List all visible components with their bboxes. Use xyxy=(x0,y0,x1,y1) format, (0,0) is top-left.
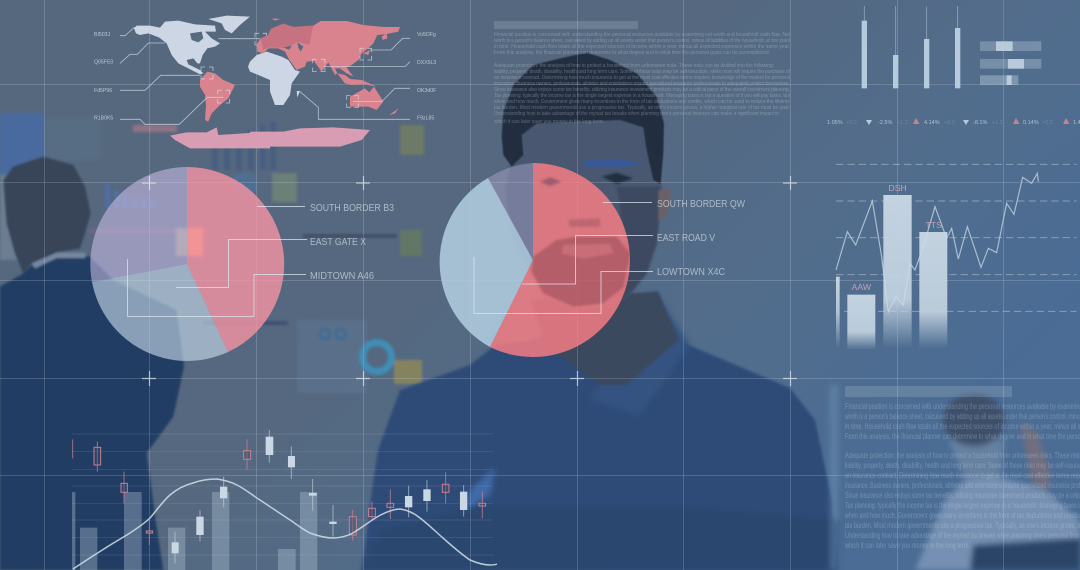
cross markers xyxy=(142,176,797,386)
labels: SOUTH BORDER B3 xyxy=(310,202,394,214)
ticker row: -8.1% xyxy=(973,120,987,126)
labels xyxy=(657,198,745,278)
map: Eurasia xyxy=(257,21,400,77)
text block: top centre: Understanding how to take advantage of the myriad tax breaks when planning one's personal finances can make a significant impact in xyxy=(494,111,779,117)
ticker row: 4.14% xyxy=(924,120,940,126)
map: Africa xyxy=(248,52,300,105)
map: inland seas xyxy=(283,42,303,52)
map: Europe and Russia shade xyxy=(261,24,313,50)
ticker row: -2.5% xyxy=(878,120,892,126)
eyebrow xyxy=(583,159,645,167)
ticker row: +1.2 xyxy=(992,120,1003,126)
smooth trend curve xyxy=(73,479,497,569)
bars xyxy=(836,277,840,348)
slice: pink xyxy=(490,163,630,357)
text block: lower right xyxy=(844,386,1080,550)
map: location codes: F9zL85 xyxy=(417,116,434,122)
text block: top centre: an insurance contract. Determining how much insurance to get at the most cost effective terms requires knowledge of the market for personal xyxy=(494,75,790,81)
map: location codes: Vo5DFg xyxy=(417,32,436,38)
text block: top centre: when and how much. Government gives many incentives in the form of tax deductions and credits, which can be used to reduce the lifetime xyxy=(494,99,790,105)
pink candles xyxy=(73,439,486,545)
text block: top centre: tax burden. Most modern governments use a progressive tax. Typically, as one's income grows, a higher marginal rate of tax must be paid. xyxy=(494,105,790,111)
map: location codes: OK3d0F xyxy=(417,88,436,94)
text block: top centre: which it can later save you money in the long term. xyxy=(494,119,604,125)
slice: lavender xyxy=(90,167,187,282)
labels: EAST ROAD V xyxy=(657,232,715,244)
neck xyxy=(530,292,678,385)
candlestick and area chart: bottom left xyxy=(72,430,493,570)
ticker row xyxy=(827,118,1080,126)
map: Antarctica east xyxy=(250,127,370,147)
map: Old World xyxy=(248,18,410,147)
ticker row: +0.2 xyxy=(1042,120,1053,126)
text block: lower right: which it can later save you money in the long term. xyxy=(844,540,970,550)
text block: top centre: Financial position is concerned with understanding the personal resources available by examining net worth and household cash flow. Net xyxy=(494,32,791,38)
face features seen through the pie xyxy=(532,177,630,307)
bar and line chart: right xyxy=(836,164,1077,350)
head group xyxy=(502,53,678,385)
bar labels: TTS xyxy=(925,220,942,230)
ticker row: +0.2 xyxy=(846,120,857,126)
ticker row: +0.3 xyxy=(944,120,955,126)
map: Hudson Bay xyxy=(190,32,203,42)
face xyxy=(505,113,663,308)
map: east connector lines xyxy=(300,38,410,119)
labels: SOUTH BORDER QW xyxy=(657,198,745,210)
map: location codes: BI503J xyxy=(94,32,111,38)
slice: pink xyxy=(187,167,284,352)
connector lines xyxy=(474,202,653,314)
range bars xyxy=(980,41,1041,85)
right ear xyxy=(658,188,672,220)
map: location codes: DXX5L3 xyxy=(417,60,436,66)
candlestick summary: top right xyxy=(862,6,1041,88)
photo: central man xyxy=(362,53,838,570)
map: Asian islands and Australia xyxy=(272,18,398,115)
pie chart: left xyxy=(90,167,394,361)
map: location codes: R1B0K5 xyxy=(94,116,113,122)
labels: MIDTOWN A46 xyxy=(310,270,374,282)
head xyxy=(3,157,91,273)
labels: LOWTOWN X4C xyxy=(657,266,725,278)
slice: lavender xyxy=(488,163,533,260)
collar xyxy=(32,253,86,268)
map: North America xyxy=(134,21,220,74)
hair xyxy=(502,53,664,184)
map: Madagascar xyxy=(297,91,300,98)
shirt xyxy=(362,292,838,570)
shirt details xyxy=(362,292,838,570)
photo: man in suit at left xyxy=(0,157,184,570)
slice: light blue xyxy=(92,264,228,361)
right cheek shade xyxy=(610,187,662,303)
connector lines xyxy=(128,206,307,316)
world map with callouts xyxy=(94,16,436,148)
background bars xyxy=(72,492,317,570)
white candles xyxy=(172,430,467,563)
map: location codes: Q05FE0 xyxy=(94,60,113,66)
ticker row: 0.14% xyxy=(1023,120,1039,126)
slice: light blue xyxy=(440,178,533,347)
text block: top centre: Adequate protection: the analysis of how to protect a household from unforeseen risks. These risks can be divided into the following: xyxy=(494,63,774,69)
bar labels: DSH xyxy=(889,183,907,193)
labels: EAST GATE X xyxy=(310,236,366,248)
text block: top centre: liability, property, death, disability, health and long term care. Some of these risks may be self-insurable, while most will require the purchase of xyxy=(494,69,791,75)
photo: woman at lower right xyxy=(830,385,1080,570)
suit xyxy=(0,254,184,570)
heading bar xyxy=(845,386,1012,397)
vertical glow through the face xyxy=(576,0,578,570)
candle bodies xyxy=(862,21,960,88)
office whiteboard details xyxy=(0,113,424,393)
text block: top centre: insurance. Business owners, professionals, athletes and entertainers require specialized insurance professionals to adequately protect themselves. xyxy=(494,81,790,87)
text block: top centre: worth is a person's balance sheet, calculated by adding up all assets under that person's control, minus all liabilities of the household, at one point xyxy=(494,38,791,44)
map: Antarctica west xyxy=(170,127,270,148)
dashed guide lines xyxy=(836,164,1077,311)
bar labels xyxy=(852,183,942,292)
map: Americas and Antarctica west xyxy=(120,16,270,148)
text block: top centre: From this analysis, the financial planner can determine to what degree and in what time the personal goals can be accomplished. xyxy=(494,50,770,56)
ticker row: +1.2 xyxy=(897,120,908,126)
map: location codes xyxy=(94,32,436,122)
chart grid lines xyxy=(72,434,493,555)
map: South America xyxy=(200,72,235,122)
right eye xyxy=(602,173,633,184)
text block: top centre: Tax planning: typically the income tax is the single largest expense in a household. Managing taxes is not a question of if you will pay taxes, but xyxy=(494,93,791,99)
line series xyxy=(836,173,1038,312)
ticker row: 1.05% xyxy=(827,120,843,126)
map: Greenland xyxy=(208,16,250,33)
bar labels: AAW xyxy=(852,282,872,292)
wicks xyxy=(864,6,958,55)
map: location codes: Fd5P96 xyxy=(94,88,112,94)
labels xyxy=(310,202,394,282)
text block: top centre: Since insurance also enjoys some tax benefits, utilizing insurance investment products may be a critical piece of the overall investment planning. xyxy=(494,87,790,93)
heading bar xyxy=(494,21,638,29)
map: west connector lines xyxy=(120,28,267,124)
pie chart: right xyxy=(440,163,745,357)
text block: top centre: in time. Household cash flow totals all the expected sources of income within a year, minus all expected expenses within the same year. xyxy=(494,44,790,50)
text block: top centre xyxy=(494,21,791,125)
